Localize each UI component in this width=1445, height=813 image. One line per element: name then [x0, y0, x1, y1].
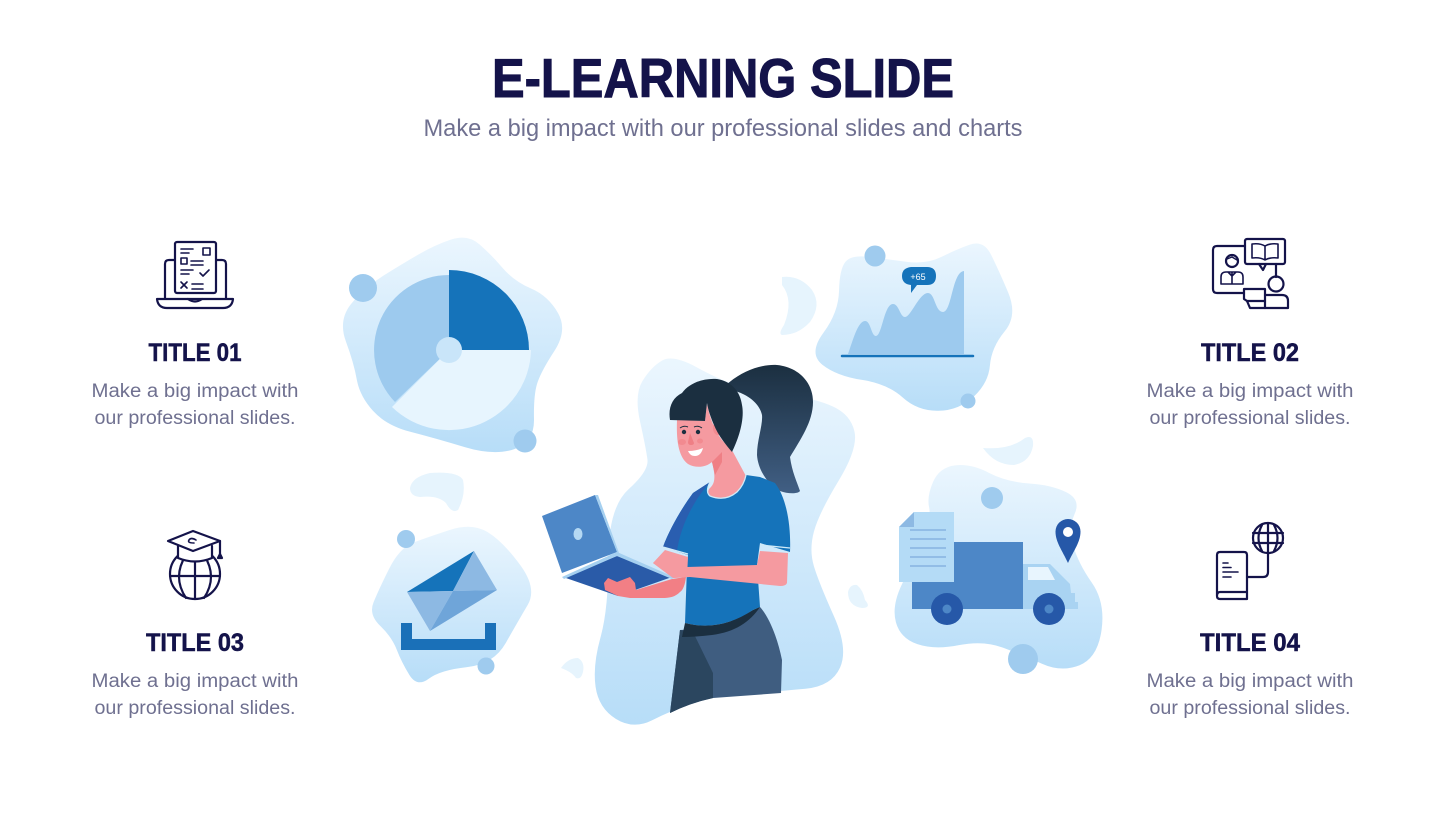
neck shadow	[712, 452, 722, 475]
pants	[670, 607, 782, 713]
pie chart illustration	[343, 238, 562, 452]
truck illustration	[895, 437, 1102, 674]
envelope illustration	[372, 473, 531, 682]
icon: book and globe	[1217, 523, 1283, 599]
text block: our professional slides.	[1150, 408, 1350, 429]
ponytail	[725, 365, 813, 493]
panel: title 04	[1146, 523, 1354, 719]
text block	[92, 671, 298, 719]
icon: laptop with test sheet	[157, 242, 233, 308]
heading: TITLE 04	[1200, 629, 1300, 657]
illustration: woman with laptop	[542, 359, 855, 725]
title: E-LEARNING SLIDE	[492, 47, 954, 109]
text block: Make a big impact with	[1146, 381, 1354, 402]
text block	[1146, 671, 1354, 719]
shirt	[663, 475, 790, 626]
text block: our professional slides.	[1150, 698, 1350, 719]
neck and face	[677, 404, 747, 500]
shirt trim	[663, 475, 790, 554]
front arm and hand	[604, 577, 686, 598]
panel: title 03	[92, 531, 298, 719]
background blob	[595, 359, 855, 725]
icon: online tutor	[1213, 239, 1288, 308]
text block: Make a big impact with	[1146, 671, 1354, 692]
heading: TITLE 01	[148, 339, 242, 367]
area chart illustration	[780, 243, 1012, 411]
back arm	[653, 551, 788, 586]
heading: TITLE 03	[146, 629, 244, 657]
panel: title 02	[1146, 239, 1354, 429]
subtitle: Make a big impact with our professional slides and charts	[424, 115, 1022, 142]
icon: graduation cap on globe	[168, 531, 222, 599]
text block: Make a big impact with	[92, 381, 298, 402]
text block	[92, 381, 298, 429]
text block: our professional slides.	[94, 408, 296, 429]
laptop	[542, 495, 674, 596]
text block: our professional slides.	[94, 698, 296, 719]
text block: Make a big impact with	[92, 671, 298, 692]
area chart illustration: +65	[910, 272, 926, 282]
decorative blobs	[561, 585, 868, 678]
face details	[678, 426, 703, 456]
waistband	[682, 607, 760, 637]
text block	[1146, 381, 1354, 429]
upper arm	[653, 550, 688, 578]
hair	[670, 379, 743, 452]
heading: TITLE 02	[1201, 339, 1299, 367]
panel: title 01	[92, 242, 298, 429]
